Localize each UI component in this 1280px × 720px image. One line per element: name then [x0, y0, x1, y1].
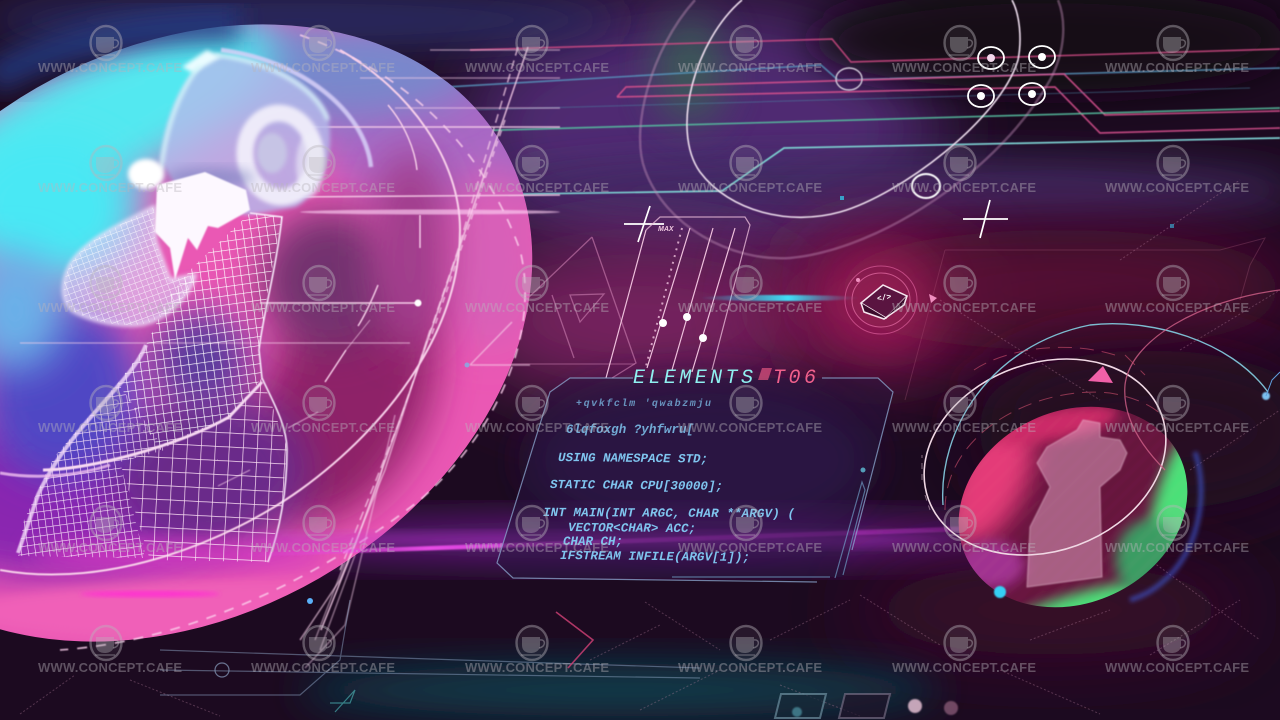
watermarks: WWW.CONCEPT.CAFE: [465, 420, 609, 435]
watermarks: WWW.CONCEPT.CAFE: [678, 180, 822, 195]
crosshairs: [624, 200, 1008, 242]
watermarks: WWW.CONCEPT.CAFE: [38, 300, 182, 315]
watermarks: WWW.CONCEPT.CAFE: [38, 540, 182, 555]
watermarks: WWW.CONCEPT.CAFE: [892, 300, 1036, 315]
code panel: [497, 367, 893, 582]
watermarks: WWW.CONCEPT.CAFE: [465, 180, 609, 195]
watermarks: WWW.CONCEPT.CAFE: [1105, 60, 1249, 75]
mane spikes: [155, 172, 250, 280]
bright muzzle: [128, 159, 164, 189]
watermarks: WWW.CONCEPT.CAFE: [678, 60, 822, 75]
horse contour: [0, 213, 287, 562]
key icon with rings: [700, 250, 937, 350]
watermarks: WWW.CONCEPT.CAFE: [38, 180, 182, 195]
watermarks: WWW.CONCEPT.CAFE: [678, 300, 822, 315]
base fine grid: [15, 380, 170, 560]
watermarks: WWW.CONCEPT.CAFE: [678, 660, 822, 675]
neck grid: [115, 210, 285, 455]
watermarks: WWW.CONCEPT.CAFE: [1105, 180, 1249, 195]
watermarks: WWW.CONCEPT.CAFE: [251, 180, 395, 195]
watermarks: WWW.CONCEPT.CAFE: [465, 60, 609, 75]
horizontal light flares: [80, 196, 1174, 604]
code text: USING NAMESPACE STD;: [558, 451, 708, 467]
base grid: [118, 375, 290, 565]
code text: [543, 398, 795, 565]
watermarks: WWW.CONCEPT.CAFE: [465, 660, 609, 675]
slider panel: MAX: [658, 226, 675, 233]
watermarks: WWW.CONCEPT.CAFE: [38, 420, 182, 435]
bottom hud rails: [160, 600, 700, 712]
code text: IFSTREAM INFILE(ARGV[1]);: [560, 549, 750, 565]
big hologram sphere: [0, 3, 532, 652]
watermarks: WWW.CONCEPT.CAFE: [892, 540, 1036, 555]
panel title: ELEMENTS: [633, 367, 753, 390]
watermarks: WWW.CONCEPT.CAFE: [892, 420, 1036, 435]
code text: INT MAIN(INT ARGC, CHAR **ARGV) (: [543, 506, 795, 521]
circuit lines: [330, 39, 1280, 197]
slider panel: [606, 217, 750, 378]
dashed network lines: [20, 180, 1280, 716]
watermarks: WWW.CONCEPT.CAFE: [251, 420, 395, 435]
target dots: [968, 46, 1055, 107]
lower jaw: [55, 200, 200, 330]
watermarks: WWW.CONCEPT.CAFE: [251, 660, 395, 675]
panel title: [633, 367, 816, 390]
watermarks: WWW.CONCEPT.CAFE: [892, 60, 1036, 75]
watermarks: WWW.CONCEPT.CAFE: [1105, 540, 1249, 555]
panel title: T06: [773, 367, 816, 390]
wireframe torso: [1027, 420, 1127, 587]
watermarks: WWW.CONCEPT.CAFE: [892, 180, 1036, 195]
watermarks: WWW.CONCEPT.CAFE: [251, 300, 395, 315]
watermarks: WWW.CONCEPT.CAFE: [1105, 420, 1249, 435]
watermarks: WWW.CONCEPT.CAFE: [465, 300, 609, 315]
watermarks: WWW.CONCEPT.CAFE: [1105, 300, 1249, 315]
watermarks: WWW.CONCEPT.CAFE: [38, 60, 182, 75]
horse head: [161, 50, 330, 215]
watermarks: WWW.CONCEPT.CAFE: [465, 540, 609, 555]
watermarks: WWW.CONCEPT.CAFE: [38, 660, 182, 675]
small hologram sphere: [958, 406, 1188, 608]
code text: +qvkfclm 'qwabzmju: [576, 398, 711, 410]
watermarks: WWW.CONCEPT.CAFE: [892, 660, 1036, 675]
key icon with rings: </>: [876, 293, 892, 304]
triangle glyphs: [440, 237, 636, 378]
code text: CHAR CH;: [563, 535, 623, 549]
watermarks: WWW.CONCEPT.CAFE: [1105, 660, 1249, 675]
bottom buttons: [775, 694, 958, 718]
code text: 6lqfoxgh ?yhfwru[: [566, 423, 694, 437]
watermarks: WWW.CONCEPT.CAFE: [678, 420, 822, 435]
sphere rings and struts: [0, 47, 560, 668]
watermarks: WWW.CONCEPT.CAFE: [251, 60, 395, 75]
watermarks: WWW.CONCEPT.CAFE: [251, 540, 395, 555]
faint background panel: [905, 238, 1265, 400]
small sphere rings: [896, 290, 1280, 600]
code text: STATIC CHAR CPU[30000];: [550, 478, 723, 494]
watermarks: WWW.CONCEPT.CAFE: [678, 540, 822, 555]
wireframe horse: [0, 50, 330, 565]
soft haze on upper-left rim: [0, 25, 240, 80]
code text: VECTOR<CHAR> ACC;: [568, 521, 696, 536]
target ring large: [640, 0, 1063, 258]
